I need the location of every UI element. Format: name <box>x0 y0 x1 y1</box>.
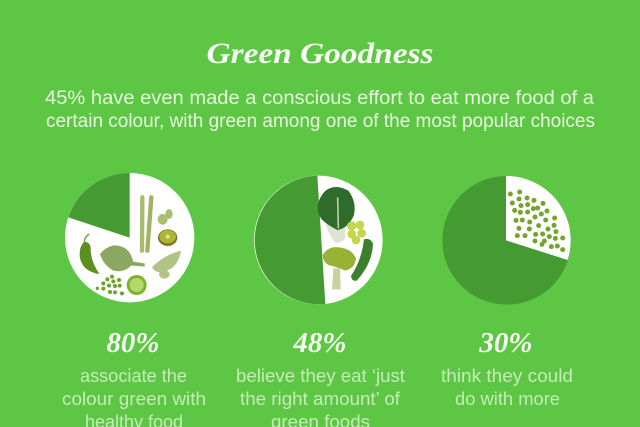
caption <box>62 365 206 427</box>
caption: colour green with <box>62 388 206 409</box>
pie chart: 80% with food illustrations <box>65 173 194 302</box>
icon: leaf sprouts <box>158 209 173 225</box>
intro text <box>45 88 595 132</box>
caption <box>441 365 573 409</box>
title: Green Goodness <box>206 37 434 70</box>
icon: grapes <box>347 221 366 244</box>
intro text: 45% have even made a conscious effort to eat more food of a <box>45 88 594 109</box>
caption: associate the <box>80 365 187 386</box>
icon: artichoke <box>100 245 145 271</box>
panel: 30% could do with more <box>441 176 573 409</box>
icon: peas <box>96 275 124 295</box>
icon: broccoli <box>323 247 356 289</box>
caption: the right amount’ of <box>240 388 401 409</box>
caption <box>236 365 405 427</box>
percentage: 80%: 80% <box>106 327 160 359</box>
panel: 48% eat the right amount of green foods <box>236 176 405 427</box>
percentage: 48%: 48% <box>292 327 347 359</box>
caption: do with more <box>455 388 560 409</box>
icon: peas <box>508 189 565 252</box>
icon: pak choi <box>318 187 355 243</box>
icon: lime <box>127 275 147 295</box>
pie chart: 30% with peas <box>442 176 571 305</box>
caption: think they could <box>441 365 573 386</box>
panel: 80% associate green with healthy food <box>62 173 206 427</box>
icon: edamame <box>152 251 181 279</box>
icon: cucumber <box>351 239 373 281</box>
icon: kiwi <box>158 229 177 246</box>
icon: asparagus <box>142 197 151 251</box>
percentage: 30%: 30% <box>478 327 533 359</box>
pie chart: 48% with vegetable illustrations <box>254 176 383 304</box>
icon: chilli pepper <box>80 234 99 274</box>
caption: believe they eat ‘just <box>236 365 405 386</box>
intro text: certain colour, with green among one of the most popular choices <box>46 111 595 132</box>
